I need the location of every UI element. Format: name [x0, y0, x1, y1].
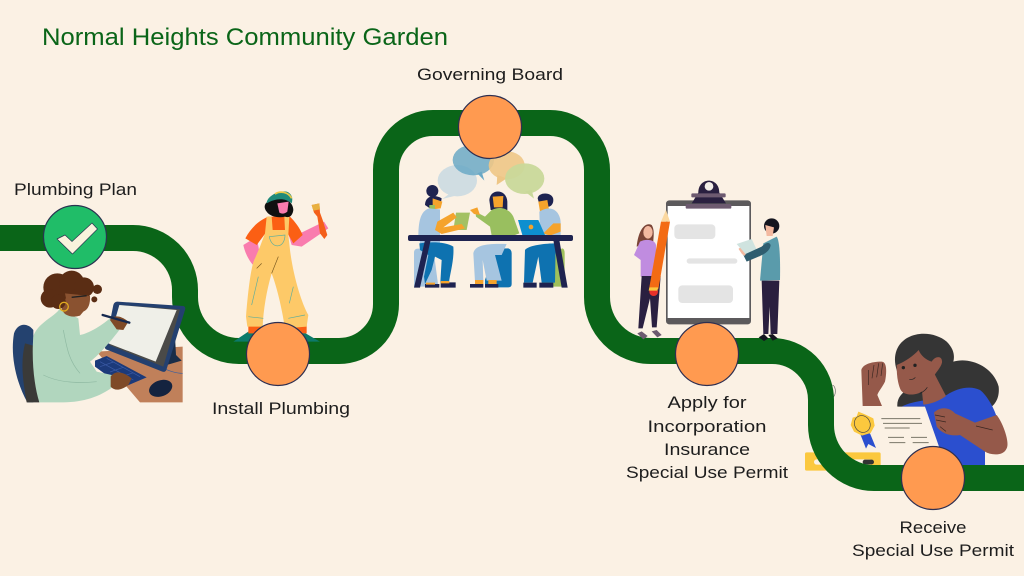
illustration: plumber in yellow overalls: [233, 191, 328, 342]
label: governing board: Governing Board: [417, 65, 563, 84]
label: apply for incorporation, insurance, special use permit: Special Use Permit: [626, 463, 788, 482]
title: Normal Heights Community Garden: [42, 24, 448, 51]
label: apply for incorporation, insurance, special use permit: Incorporation: [648, 417, 766, 436]
label: install plumbing: Install Plumbing: [212, 399, 350, 418]
label: apply for incorporation, insurance, special use permit: Apply for: [668, 393, 747, 412]
table: [408, 235, 573, 288]
label: receive special use permit: Receive: [900, 518, 966, 537]
node: receive: [902, 446, 964, 510]
label: apply for incorporation, insurance, special use permit: Insurance: [664, 440, 750, 459]
illustration: person drawing at a tablet: [13, 271, 185, 402]
node: install plumbing: [246, 322, 310, 386]
label: apply for incorporation, insurance, special use permit: [626, 393, 788, 482]
illustration: clipboard checklist with two people: [634, 181, 780, 341]
left person: [414, 185, 470, 288]
winding green path: [0, 123, 1024, 478]
label: receive special use permit: Special Use Permit: [852, 541, 1014, 560]
clipboard: [666, 181, 751, 324]
man with paper: [737, 218, 780, 341]
illustration: receive permit woman with certificate: [805, 334, 1008, 471]
middle person: [470, 191, 519, 288]
woman with pencil: [634, 210, 670, 339]
node: governing board: [458, 96, 522, 158]
right person: [518, 194, 565, 288]
label: plumbing plan: Plumbing Plan: [14, 180, 137, 199]
node: completed check: [44, 206, 106, 268]
node: apply: [676, 322, 738, 386]
illustration: governing board meeting: [408, 145, 573, 288]
speech bubbles: [438, 145, 544, 199]
label: receive special use permit: [852, 518, 1014, 560]
